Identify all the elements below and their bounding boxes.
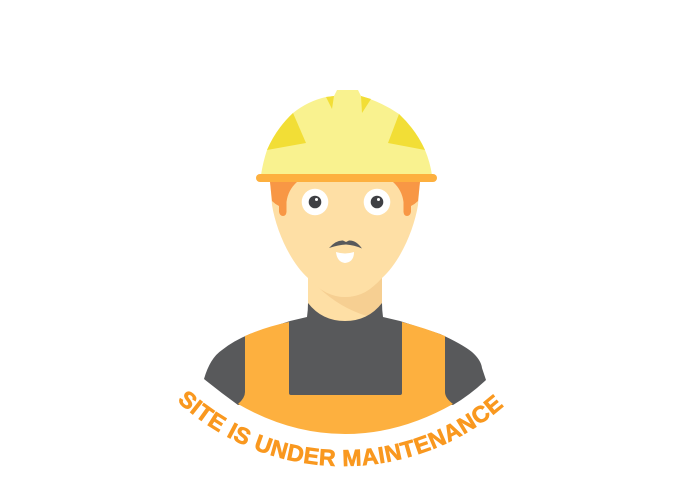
helmet highlights: [267, 96, 425, 150]
hard hat: [256, 90, 437, 182]
hair right: [393, 182, 420, 216]
helmet dome: [261, 90, 432, 175]
worker neck: [308, 270, 382, 322]
hair left: [270, 182, 297, 216]
moustache: [329, 240, 362, 248]
mouth: [336, 252, 354, 263]
face: [270, 180, 420, 297]
left eye: [302, 189, 328, 215]
head: [270, 180, 420, 297]
orange vest: [238, 322, 453, 434]
helmet brim: [256, 174, 437, 182]
caption curved text: SITE IS UNDER MAINTENANCE: [179, 391, 504, 466]
torso: [204, 303, 486, 434]
shoulders and sleeves: [204, 303, 486, 405]
right eye: [364, 189, 390, 215]
